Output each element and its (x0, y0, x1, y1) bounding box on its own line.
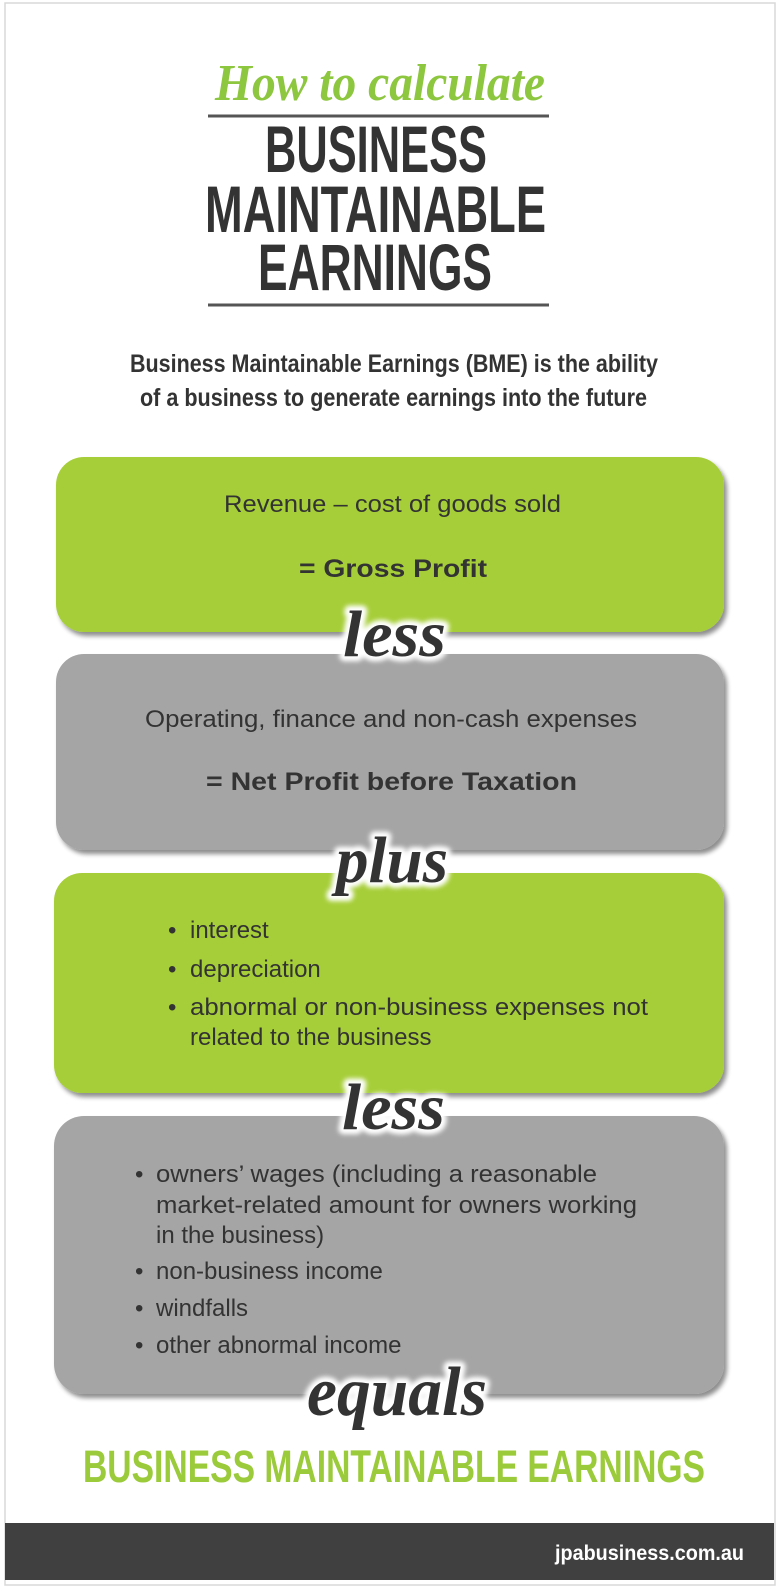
panel: net profit (56, 654, 724, 850)
footer (5, 1523, 774, 1580)
panel: gross profit: = Gross Profit (299, 555, 488, 583)
panel: add-backs: depreciation (190, 956, 321, 983)
title: Business Maintainable Earnings: EARNINGS (258, 230, 492, 304)
subtitle: Business Maintainable Earnings (BME) is the ability (130, 350, 658, 378)
panel: deductions: • (135, 1161, 143, 1188)
panel: deductions: in the business) (156, 1222, 324, 1249)
footer: jpabusiness.com.au (554, 1542, 744, 1565)
connector: less: less (342, 1071, 445, 1144)
panel: deductions: other abnormal income (156, 1332, 401, 1359)
panel: deductions: owners’ wages (including a reasonable (156, 1161, 597, 1188)
panel: gross profit (56, 457, 724, 632)
subtitle: of a business to generate earnings into the future (140, 384, 647, 412)
panel: add-backs: • (168, 994, 176, 1021)
panel: add-backs: • (168, 956, 176, 983)
title: How to calculate: How to calculate (214, 55, 545, 112)
panel: add-backs: abnormal or non-business expenses not (190, 994, 648, 1021)
panel: deductions: • (135, 1332, 143, 1359)
panel: deductions: windfalls (155, 1295, 248, 1322)
panel: net profit: Operating, finance and non-cash expenses (145, 706, 637, 733)
connector: equals: equals (307, 1354, 487, 1431)
title: Business Maintainable Earnings: MAINTAINABLE (205, 172, 546, 246)
panel: add-backs: related to the business (190, 1024, 432, 1051)
panel: deductions: non-business income (156, 1258, 383, 1285)
panel: deductions (54, 1116, 724, 1394)
connector: less: less (343, 598, 446, 671)
panel: add-backs: • (168, 917, 176, 944)
panel: deductions: • (135, 1295, 143, 1322)
connector: less: less (343, 598, 446, 671)
title: Business Maintainable Earnings: BUSINESS (265, 112, 487, 186)
subtitle (130, 350, 658, 412)
connector: equals: equals (307, 1354, 487, 1431)
panel: add-backs: interest (190, 917, 269, 944)
panel: deductions: • (135, 1258, 143, 1285)
connector: plus: plus (331, 824, 448, 897)
panel: deductions: market-related amount for owners working (156, 1192, 637, 1219)
connector: plus: plus (331, 824, 448, 897)
panel: net profit: = Net Profit before Taxation (206, 768, 577, 796)
title: Business Maintainable Earnings (205, 112, 546, 304)
panel: gross profit: Revenue – cost of goods sold (224, 491, 561, 518)
connector: less: less (342, 1071, 445, 1144)
panel: add-backs (54, 873, 724, 1093)
